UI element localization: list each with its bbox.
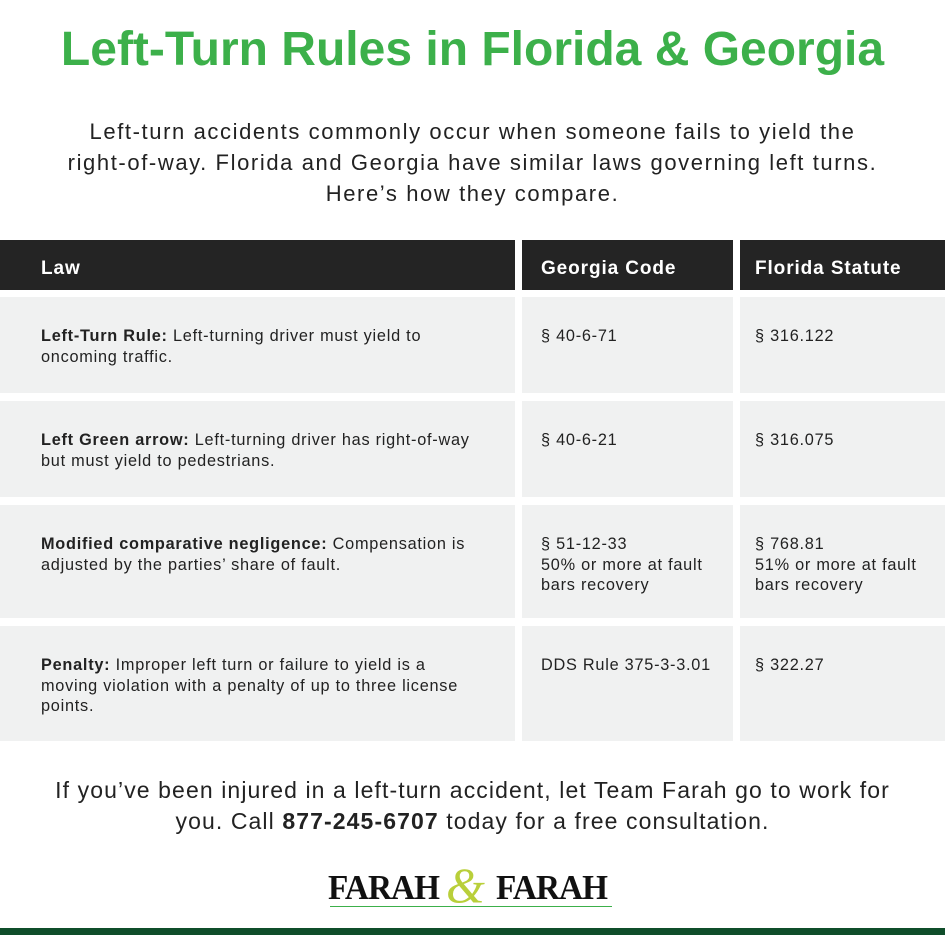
row 4 law: moving violation with a penalty of up to three license [41, 676, 458, 694]
row 2 georgia [522, 401, 733, 497]
row 2 law: but must yield to pedestrians. [41, 452, 275, 470]
row 3 florida: bars recovery [755, 576, 863, 594]
intro text: right-of-way. Florida and Georgia have similar laws governing left turns. [68, 150, 877, 175]
header: law: Law [41, 258, 81, 279]
row 4 georgia [522, 626, 733, 741]
row 4 florida [740, 626, 945, 741]
row 4 law [0, 626, 515, 741]
logo: FARAH [496, 868, 607, 907]
row 3 georgia: § 51-12-33 [541, 535, 627, 553]
row 3 florida [740, 505, 945, 618]
row 3 law: Modified comparative negligence: Compensation is [41, 535, 465, 553]
row 3 georgia [522, 505, 733, 618]
row 1 law: Left-Turn Rule: Left-turning driver must yield to [41, 327, 421, 345]
header: georgia: Georgia Code [541, 258, 676, 279]
row 3 florida: 51% or more at fault [755, 556, 917, 574]
row 2 georgia: § 40-6-21 [541, 431, 617, 449]
row 2 florida [740, 401, 945, 497]
row 1 law: oncoming traffic. [41, 348, 173, 366]
row 2 florida: § 316.075 [755, 431, 834, 449]
row 4 law: Penalty: Improper left turn or failure to yield is a [41, 656, 426, 674]
row 3 law: adjusted by the parties’ share of fault. [41, 556, 341, 574]
bottom bar [0, 928, 945, 935]
table [0, 240, 945, 741]
row 2 law [0, 401, 515, 497]
row 3 florida: § 768.81 [755, 535, 824, 553]
header: law [0, 240, 515, 290]
footer call to action: If you’ve been injured in a left-turn accident, let Team Farah go to work for [55, 777, 890, 803]
row 2 law: Left Green arrow: Left-turning driver has right-of-way [41, 431, 470, 449]
intro text: Here’s how they compare. [326, 181, 619, 206]
row 4 florida: § 322.27 [755, 656, 824, 674]
row 3 law [0, 505, 515, 618]
logo: FARAH [328, 868, 439, 907]
row 3 georgia: 50% or more at fault [541, 556, 703, 574]
footer call to action [55, 777, 890, 834]
header: georgia [522, 240, 733, 290]
row 4 law: points. [41, 697, 94, 715]
row 4 georgia: DDS Rule 375-3-3.01 [541, 656, 711, 674]
footer call to action: you. Call 877-245-6707 today for a free consultation. [175, 808, 770, 834]
logo: & [446, 857, 485, 913]
intro text: Left-turn accidents commonly occur when someone fails to yield the [90, 119, 855, 144]
row 1 georgia: § 40-6-71 [541, 327, 617, 345]
row 1 georgia [522, 297, 733, 393]
row 1 florida [740, 297, 945, 393]
header: florida [740, 240, 945, 290]
title: Left-Turn Rules in Florida & Georgia [61, 23, 884, 76]
row 1 florida: § 316.122 [755, 327, 834, 345]
logo [328, 857, 612, 913]
row 3 georgia: bars recovery [541, 576, 649, 594]
intro text [68, 119, 877, 206]
row 1 law [0, 297, 515, 393]
header: florida: Florida Statute [755, 258, 902, 279]
